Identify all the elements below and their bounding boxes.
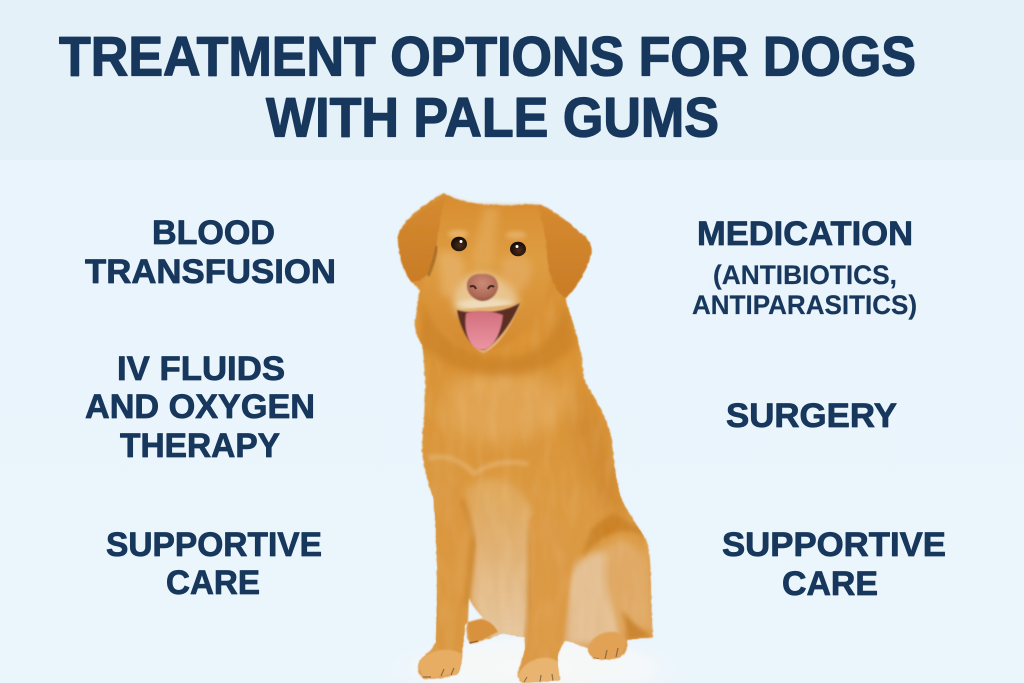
belly light fur [565,551,620,645]
left column: blood transfusion [85,214,336,291]
left column: blood transfusion: BLOOD [152,214,275,252]
left ear shadow [428,246,437,276]
front right paw [518,658,561,683]
head [423,196,551,352]
gap between front leg and chest [468,598,483,622]
left column: IV fluids and oxygen therapy: AND OXYGEN [85,388,315,426]
forehead blaze [472,208,499,268]
left column: IV fluids and oxygen therapy [85,350,315,465]
illustration: golden dog [395,190,657,683]
left column: IV fluids and oxygen therapy: THERAPY [120,427,280,465]
chest crease [428,457,528,474]
left column: blood transfusion: TRANSFUSION [85,253,336,291]
muzzle [452,272,520,315]
floor shadow [375,630,695,683]
left eye [451,237,467,251]
right cheek light [500,255,532,296]
left cheek light [438,251,466,297]
title: TREATMENT OPTIONS FOR DOGS [59,24,916,88]
right brow light [506,231,526,239]
fur streak texture dark [395,190,657,683]
right ear [538,206,592,298]
dog body [398,193,653,683]
body shade right [578,388,630,515]
front right leg [522,513,572,665]
toe lines [423,641,618,682]
mouth [457,303,520,350]
rear paw [588,632,627,660]
right column: supportive care: SUPPORTIVE [722,526,946,564]
left brow light [448,230,468,238]
haunch top shade [582,512,648,558]
right column: supportive care [722,526,946,603]
tongue [465,311,503,350]
left ear [398,197,445,282]
right column: medication: (ANTIBIOTICS, [713,260,897,290]
right eye [510,242,526,256]
ruff shadow under head [420,300,575,375]
haunch fur [605,541,652,632]
neck highlight [445,373,572,442]
title [59,24,916,148]
back-left paw [468,619,498,645]
front left paw [418,650,463,679]
nose [467,274,498,301]
right column: medication: ANTIPARASITICS) [692,290,917,320]
left column: supportive care: SUPPORTIVE [106,526,322,564]
right leg edge shade [524,590,528,639]
tongue groove [482,314,484,340]
right column: medication [692,215,917,320]
lower lip rim [456,304,520,353]
title: WITH PALE GUMS [266,86,719,148]
left column: supportive care [106,526,322,602]
header band [0,0,1024,160]
chest fur [466,478,532,645]
right column: medication: MEDICATION [697,215,913,253]
left leg inner shade [462,500,473,605]
left column: supportive care: CARE [166,564,260,602]
left column: IV fluids and oxygen therapy: IV FLUIDS [117,350,285,388]
muzzle pale lip [456,299,514,310]
right column: supportive care: CARE [782,565,878,603]
front left leg [430,469,474,655]
lower hind foot shade [622,610,652,640]
right column: surgery: SURGERY [726,397,897,435]
fur streak texture light [416,197,648,650]
